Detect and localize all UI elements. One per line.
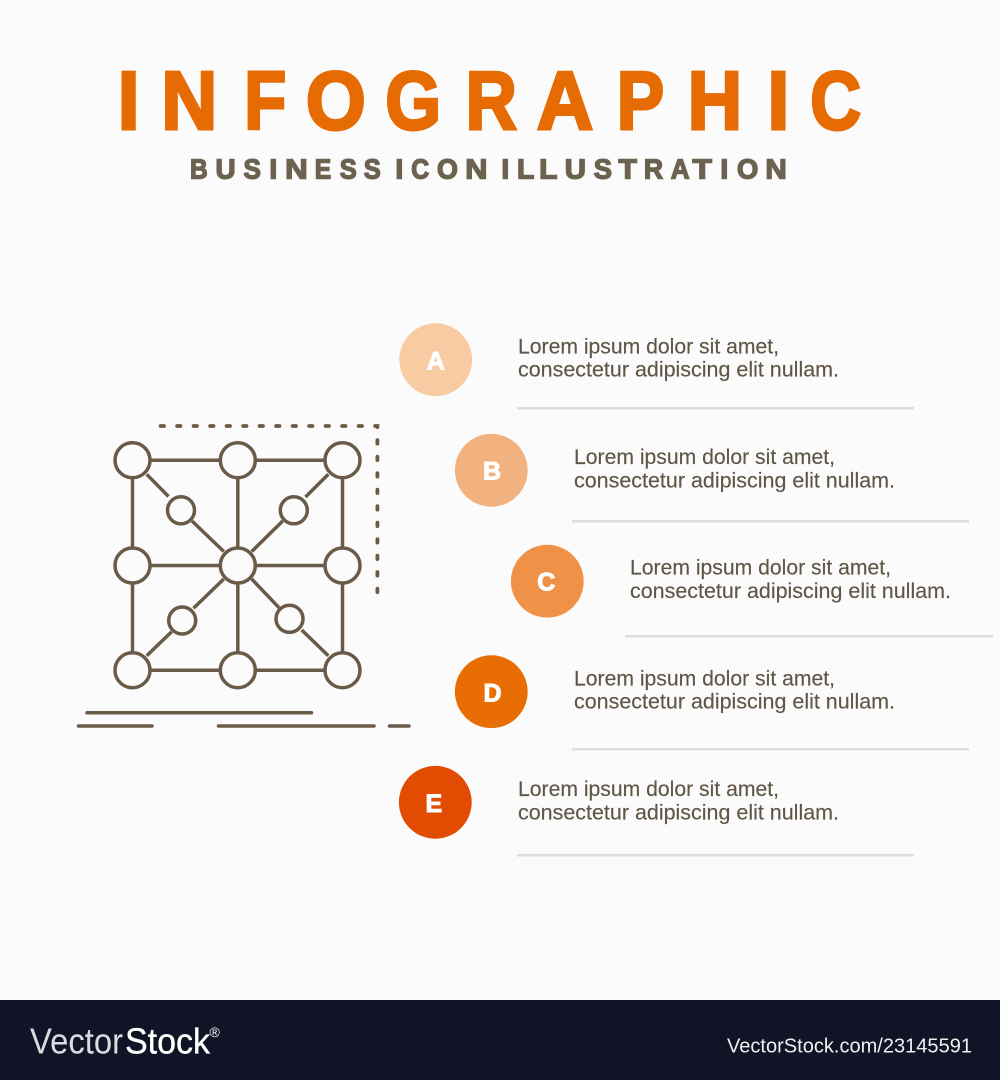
subtitle: T [618, 154, 637, 184]
title: N [161, 54, 217, 147]
footer bar: ® [210, 1024, 220, 1040]
title: F [244, 54, 286, 147]
subtitle: U [565, 154, 586, 184]
icon: network grid [78, 426, 409, 726]
footer bar: VectorStock.com/23145591 [727, 1036, 972, 1058]
step D: Lorem ipsum dolor sit amet, [574, 668, 835, 690]
step A [399, 323, 914, 410]
step D [455, 655, 969, 750]
step C: C [537, 568, 555, 596]
subtitle: I [269, 154, 277, 184]
subtitle: I [395, 154, 403, 184]
subtitle: A [671, 154, 690, 184]
subtitle: C [411, 154, 429, 184]
step E: E [425, 790, 442, 818]
subtitle: S [594, 154, 612, 184]
footer bar [0, 1000, 1000, 1080]
step E [399, 766, 914, 856]
title: I [118, 54, 140, 147]
title: R [466, 54, 517, 147]
subtitle: N [465, 154, 488, 184]
step E: Lorem ipsum dolor sit amet, [518, 778, 779, 801]
subtitle: I [501, 154, 509, 184]
subtitle: R [644, 154, 663, 184]
subtitle: O [437, 154, 458, 184]
step E: consectetur adipiscing elit nullam. [518, 802, 839, 824]
subtitle: L [517, 154, 534, 184]
title: A [537, 54, 593, 147]
title: I [767, 54, 789, 147]
step C [511, 545, 993, 638]
step B: B [483, 458, 501, 486]
step A: consectetur adipiscing elit nullam. [518, 359, 839, 382]
step B [455, 434, 969, 522]
subtitle: T [692, 154, 712, 184]
subtitle: O [737, 154, 758, 184]
title: P [617, 54, 664, 147]
step B: Lorem ipsum dolor sit amet, [574, 446, 835, 469]
footer bar: Vector [30, 1020, 123, 1061]
subtitle: U [216, 154, 236, 184]
step C: Lorem ipsum dolor sit amet, [630, 556, 891, 580]
step D: consectetur adipiscing elit nullam. [574, 691, 895, 714]
subtitle: N [285, 154, 308, 184]
subtitle: L [539, 154, 558, 184]
title: G [385, 54, 441, 147]
title: C [810, 54, 861, 147]
subtitle: E [315, 154, 331, 184]
subtitle: S [340, 154, 357, 184]
subtitle: B [190, 154, 208, 184]
step B: consectetur adipiscing elit nullam. [574, 469, 895, 492]
title: O [306, 54, 366, 147]
step C: consectetur adipiscing elit nullam. [630, 580, 951, 603]
step A: Lorem ipsum dolor sit amet, [518, 336, 779, 358]
subtitle: N [765, 154, 787, 184]
footer bar: Stock [125, 1020, 211, 1061]
step D: D [483, 679, 502, 707]
step A: A [427, 348, 445, 376]
subtitle: S [244, 154, 261, 184]
title: H [688, 54, 742, 147]
subtitle: I [720, 154, 728, 184]
subtitle: S [364, 154, 381, 184]
